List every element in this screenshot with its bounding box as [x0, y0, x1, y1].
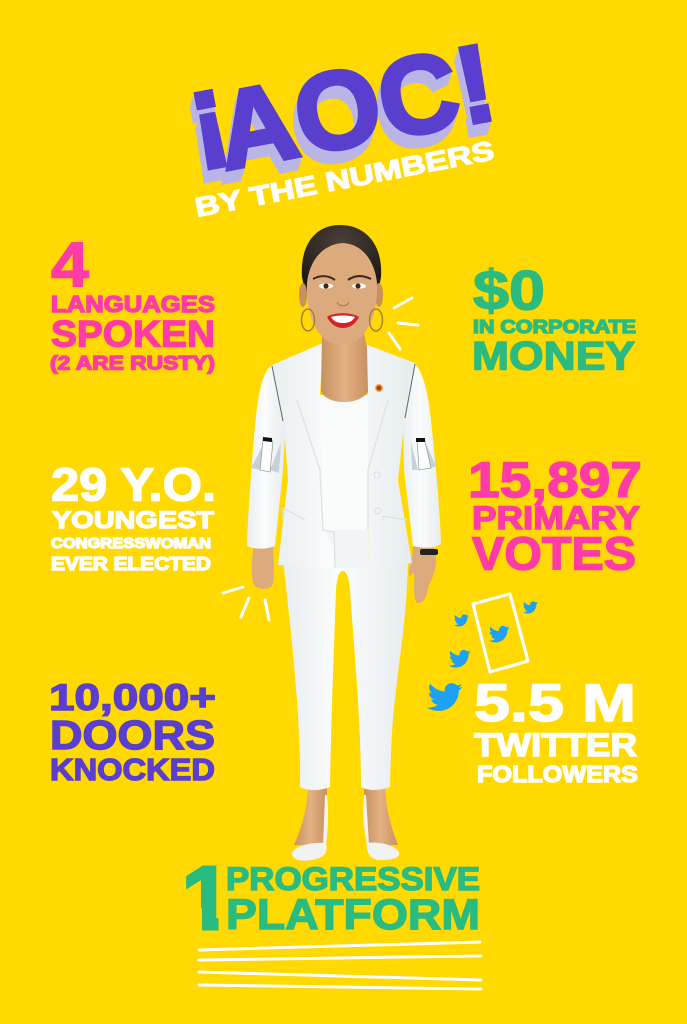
- heading: ¡AOC! with 3D shadow: AOC!: [207, 21, 505, 194]
- stat: 10,000+ doors knocked: KNOCKED: [50, 752, 215, 787]
- lapel dark edges: [272, 364, 415, 421]
- icons: twitter birds: [427, 601, 538, 712]
- stat: 29 years old youngest congresswoman: EVER ELECTED: [51, 553, 211, 574]
- figure: action figure in white suit: [247, 225, 441, 861]
- stat: 10,000+ doors knocked: DOORS: [50, 712, 215, 758]
- stat: $0 in corporate money: IN CORPORATE: [473, 316, 636, 337]
- platform lines: [199, 942, 481, 989]
- right sleeve: [403, 363, 441, 548]
- burst lines near hand: [223, 587, 269, 620]
- face: [307, 243, 377, 344]
- stat: 4 languages spoken: LANGUAGES: [51, 291, 215, 317]
- number 5.5 M: 5.5 M: [474, 674, 636, 733]
- number $0: $0: [473, 258, 545, 322]
- stat: 29 years old youngest congresswoman: [51, 458, 216, 574]
- stat: 5.5 M twitter followers: TWITTER: [474, 727, 637, 763]
- stat: $0 in corporate money: [472, 258, 636, 378]
- stat: $0 in corporate money: MONEY: [472, 334, 635, 378]
- jacket body: [272, 343, 415, 568]
- sleeve cutouts: [260, 439, 431, 472]
- platform: 1 progressive platform: PLATFORM: [226, 891, 480, 939]
- hair: [302, 225, 381, 292]
- stat: 15,897 primary votes: PRIMARY: [472, 500, 640, 536]
- nose: [337, 302, 349, 306]
- heading: ¡AOC! with 3D shadow: AOC!: [204, 31, 502, 204]
- number 1: 1: [182, 849, 232, 949]
- earrings: [302, 309, 382, 331]
- stat: 15,897 primary votes: VOTES: [472, 528, 636, 580]
- ears: [299, 283, 307, 307]
- trousers: [283, 560, 408, 790]
- left hand: [252, 545, 274, 589]
- subtitle: by the numbers: BY THE NUMBERS: [192, 135, 497, 223]
- stat: 29 years old youngest congresswoman: YOUNGEST: [52, 507, 214, 534]
- heading: ¡AOC! with 3D shadow: AOC!: [206, 25, 504, 198]
- platform: 1 progressive platform: [186, 866, 480, 930]
- eyes: [319, 283, 366, 289]
- heading: ¡AOC! with 3D shadow: ¡: [177, 53, 235, 181]
- heading: ¡AOC! with 3D shadow: AOC!: [203, 34, 501, 207]
- title: ¡AOC! by the numbers: [174, 21, 505, 223]
- left sleeve: [247, 365, 286, 549]
- stat: 4 languages spoken: SPOKEN: [51, 314, 215, 354]
- heading: ¡AOC! with 3D shadow: ¡: [174, 62, 232, 190]
- right hand: [409, 546, 436, 603]
- ankles and shoes: [292, 788, 399, 861]
- bracelet: [420, 549, 438, 555]
- mouth: [327, 313, 359, 328]
- shirt: [320, 400, 368, 530]
- stat: 4 languages spoken: [50, 230, 215, 374]
- number 4: 4: [51, 230, 89, 300]
- heading: ¡AOC! with 3D shadow: ¡: [178, 49, 236, 177]
- number 29 Y.O.: 29 Y.O.: [51, 458, 216, 510]
- stat: 10,000+ doors knocked: [49, 677, 216, 787]
- eyebrows: [313, 276, 371, 280]
- burst lines near head: [389, 298, 418, 349]
- lapel pin: [375, 384, 383, 392]
- stat: 4 languages spoken: (2 ARE RUSTY): [50, 354, 215, 374]
- platform: 1 progressive platform: PROGRESSIVE: [226, 861, 480, 897]
- stat: 5.5 M twitter followers: FOLLOWERS: [477, 761, 638, 787]
- heading: ¡AOC! with 3D shadow: ¡: [175, 59, 233, 187]
- stat: 5.5 M twitter followers: [474, 674, 638, 787]
- stat: 15,897 primary votes: [468, 452, 642, 580]
- jacket lapel lines: [283, 400, 407, 568]
- stat: 29 years old youngest congresswoman: CONGRESSWOMAN: [51, 536, 211, 552]
- icon: phone outline: [473, 594, 528, 672]
- sleeve shading: [251, 442, 436, 473]
- heading: ¡AOC! with 3D shadow: ¡: [176, 56, 234, 184]
- neck and chest: [321, 330, 368, 402]
- number 15,897: 15,897: [468, 452, 642, 508]
- number 10,000+: 10,000+: [49, 677, 216, 718]
- heading: ¡AOC! with 3D shadow: AOC!: [205, 28, 503, 201]
